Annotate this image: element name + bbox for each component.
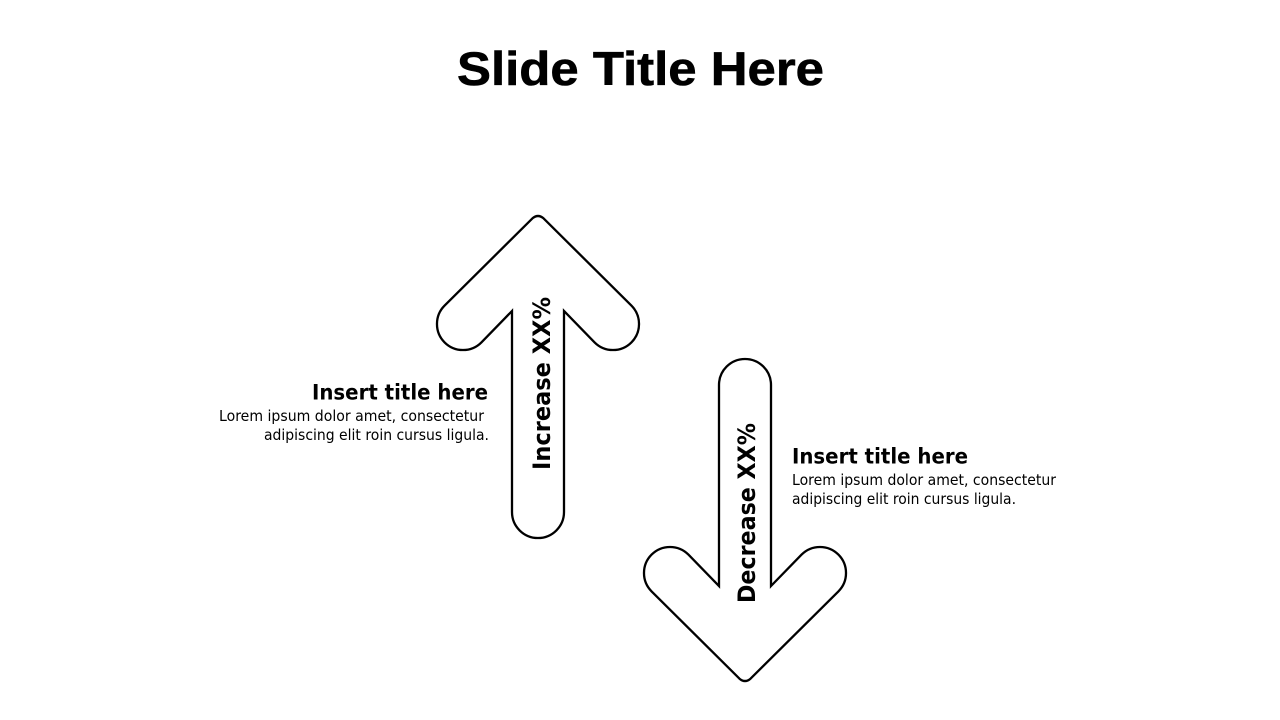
arrow label: increase: Increase XX%: [528, 297, 556, 470]
text block: right: [792, 444, 1057, 508]
arrow label: decrease: Decrease XX%: [733, 423, 761, 603]
right body line 2: adipiscing elit roin cursus ligula.: [792, 490, 1016, 508]
left body line 2: adipiscing elit roin cursus ligula.: [264, 426, 489, 444]
icon: down arrow: [644, 359, 846, 681]
left heading: Insert title here: [312, 380, 488, 404]
right heading: Insert title here: [792, 444, 968, 468]
title: Slide Title Here: [457, 42, 824, 95]
right body line 1: Lorem ipsum dolor amet, consectetur: [792, 471, 1057, 489]
icon: up arrow: [437, 216, 639, 538]
left body line 1: Lorem ipsum dolor amet, consectetur: [219, 407, 485, 425]
text block: left: [219, 380, 489, 444]
